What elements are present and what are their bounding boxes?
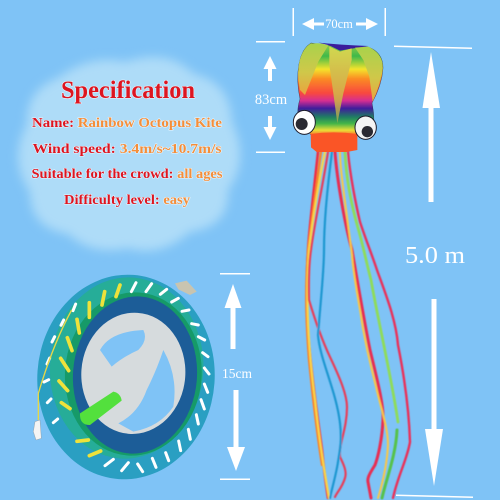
reel dimension: 15cm [220,273,252,480]
width dimension: 70cm [292,8,386,36]
top opening [318,43,368,51]
spec line: suitable crowd: Suitable for the crowd: all ages [32,167,223,182]
center flap [329,47,352,123]
handle [80,392,122,425]
top clasp [175,281,197,295]
spec line: wind speed: Wind speed: 3.4m/s~10.7m/s [32,142,222,157]
dark blue spool ring [68,292,202,458]
yellow slots [59,285,120,456]
right eye [355,116,376,139]
right window [118,350,175,432]
height dimension: 83cm: 83cm [255,92,288,108]
octopus kite body [293,43,383,152]
cloud panel [18,57,240,251]
top-left window [100,330,145,367]
reel dimension: 15cm: 15cm [222,366,252,381]
kite line reel [30,269,222,485]
collar [311,132,357,152]
reel outer rim [30,269,222,485]
kite ribbons [306,152,410,498]
width dimension: 70cm: 70cm [325,17,353,31]
total length dimension: 5.0 m: 5.0 m [405,243,465,269]
height dimension: 83cm [255,41,288,153]
right flap [355,47,383,102]
reel front green ring [44,272,209,464]
kite canopy [298,43,383,135]
white slots [44,283,209,472]
line snap clip [33,310,72,440]
clear inner hub [77,309,189,437]
left eye [293,110,315,134]
spec line: name: Name: Rainbow Octopus Kite [32,116,222,131]
total length dimension: 5.0 m [394,46,473,498]
spec line: difficulty: Difficulty level: easy [64,193,190,208]
left flap [298,43,328,95]
heading: Specification: Specification [61,77,195,104]
